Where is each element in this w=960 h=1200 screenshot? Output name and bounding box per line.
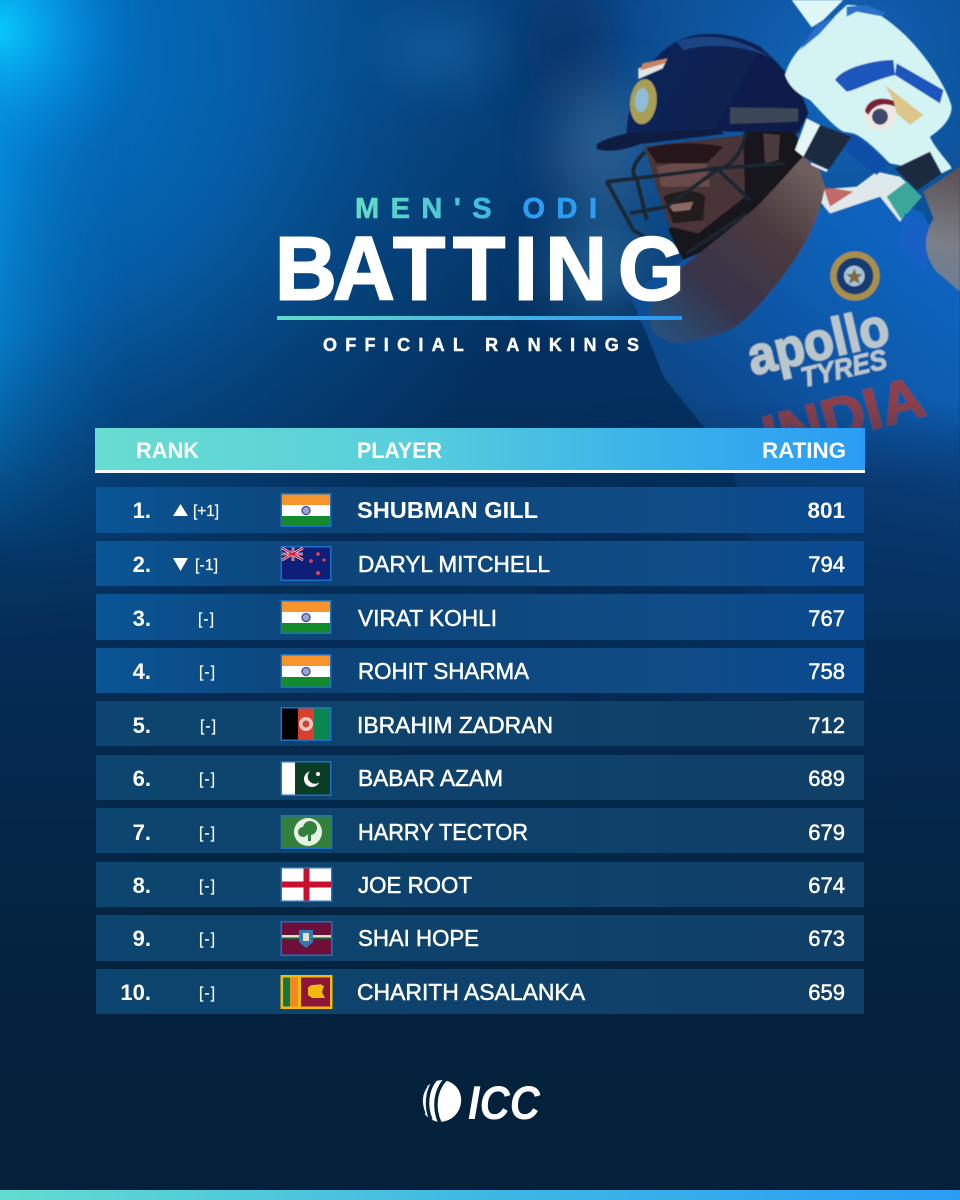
- row 5: Ibrahim Zadran: [96, 701, 864, 746]
- row 6: Babar Azam: BABAR AZAM: [358, 765, 503, 791]
- row 4: Rohit Sharma: 758: [808, 659, 845, 684]
- helmet shell: [627, 34, 808, 135]
- jersey sponsor logo: TYRES: [798, 343, 890, 393]
- rankings table: [95, 428, 865, 1014]
- flag: Sri Lanka: [280, 975, 332, 1009]
- row 8: Joe Root: 8.: [133, 873, 151, 898]
- photo fade: [600, 400, 960, 700]
- flag: Afghanistan: [280, 707, 332, 741]
- row 1: Shubman Gill: [+1]: [193, 503, 219, 520]
- jersey sponsor logo: apollo: [742, 297, 895, 387]
- row 8: Joe Root: 674: [808, 873, 845, 898]
- collar and shoulder trim: [814, 172, 922, 222]
- row 6: Babar Azam: 6.: [133, 766, 151, 791]
- flag: Pakistan: [280, 761, 332, 796]
- row 6: Babar Azam: [-]: [199, 771, 215, 788]
- body edge blend: [590, 450, 690, 670]
- face: [645, 135, 745, 233]
- eye shadow: [647, 143, 723, 163]
- glove: blue finger pads: [835, 60, 895, 92]
- glove: blue trim: [800, 5, 887, 50]
- far arm: [923, 167, 960, 292]
- flag: India: [280, 654, 332, 688]
- row 2: Daryl Mitchell: [-1]: [195, 557, 218, 574]
- row 2: Daryl Mitchell: [96, 541, 864, 586]
- row 2: Daryl Mitchell: DARYL MITCHELL: [358, 551, 550, 577]
- row 6: Babar Azam: 689: [808, 766, 845, 791]
- helmet grille: [607, 128, 785, 255]
- row 1: Shubman Gill: [96, 487, 864, 533]
- row 8: Joe Root: [-]: [199, 878, 215, 895]
- table header: [95, 428, 865, 473]
- row 4: Rohit Sharma: [96, 648, 864, 693]
- row 9: Shai Hope: 9.: [133, 926, 151, 951]
- row 4: Rohit Sharma: 4.: [133, 659, 151, 684]
- row 2: Daryl Mitchell: 2.: [133, 552, 151, 577]
- row 2: Daryl Mitchell: 794: [808, 552, 845, 577]
- row 3: Virat Kohli: [96, 594, 864, 640]
- row 3: Virat Kohli: 767: [808, 606, 845, 631]
- neck and lower head shadow: [668, 130, 807, 260]
- row 9: Shai Hope: [-]: [199, 931, 215, 948]
- row 1: Shubman Gill: 1.: [133, 498, 151, 523]
- mouth and beard: [663, 191, 705, 223]
- row 1: Shubman Gill: 801: [807, 498, 845, 523]
- row 8: Joe Root: JOE ROOT: [358, 872, 472, 898]
- title rule: [277, 316, 682, 320]
- row 10: Charith Asalanka: [-]: [199, 985, 215, 1002]
- row 5: Ibrahim Zadran: 712: [808, 713, 845, 738]
- flag: New Zealand: [280, 546, 332, 581]
- flag: India: [280, 600, 332, 634]
- eyebrow: MEN'S ODI: MEN'S ODI: [355, 193, 597, 225]
- row 9: Shai Hope: 673: [808, 926, 845, 951]
- wristband: far: [895, 152, 942, 191]
- row 1: Shubman Gill: SHUBMAN GILL: [357, 497, 538, 523]
- row 10: Charith Asalanka: [96, 969, 864, 1014]
- sleeve: [898, 213, 935, 270]
- flag: England: [280, 867, 332, 902]
- row 3: Virat Kohli: VIRAT KOHLI: [358, 605, 497, 631]
- row 10: Charith Asalanka: 10.: [120, 980, 151, 1005]
- subheading: OFFICIAL RANKINGS: OFFICIAL RANKINGS: [323, 335, 639, 355]
- row 9: Shai Hope: [96, 915, 864, 961]
- table header: RATING: [762, 438, 846, 463]
- row 7: Harry Tector: 7.: [133, 820, 151, 845]
- helmet BCCI crest: [628, 78, 659, 126]
- row 5: Ibrahim Zadran: [-]: [200, 718, 216, 735]
- title block: [275, 193, 684, 355]
- cheek highlight: [657, 157, 710, 187]
- row 10: Charith Asalanka: CHARITH ASALANKA: [357, 979, 586, 1005]
- jersey India lettering: INDIA: [755, 364, 932, 470]
- bat handle: [792, 0, 843, 27]
- background: [0, 0, 960, 918]
- row 4: Rohit Sharma: ROHIT SHARMA: [358, 658, 530, 684]
- ICC logo: [414, 1074, 541, 1129]
- icon: cricket ball with seams: [414, 1074, 468, 1128]
- lower body shadow right: [866, 640, 960, 730]
- row 9: Shai Hope: SHAI HOPE: [358, 925, 479, 951]
- near arm: [648, 157, 825, 343]
- jersey BCCI crest: [830, 251, 880, 301]
- helmet India flag sticker: [638, 58, 667, 79]
- ear: [763, 133, 780, 163]
- player photo: batter in India kit: [597, 0, 960, 700]
- row 3: Virat Kohli: [-]: [198, 611, 214, 628]
- row 7: Harry Tector: [96, 808, 864, 853]
- row 5: Ibrahim Zadran: IBRAHIM ZADRAN: [357, 712, 553, 738]
- bat handle badge: [864, 98, 896, 130]
- flag: India: [280, 493, 332, 527]
- glove: palm shade: [843, 133, 890, 175]
- row 5: Ibrahim Zadran: 5.: [133, 713, 151, 738]
- row 7: Harry Tector: HARRY TECTOR: [358, 819, 528, 845]
- heading: BATTING: BATTING: [275, 219, 684, 319]
- row 7: Harry Tector: 679: [808, 820, 845, 845]
- helmet top highlight: [677, 37, 772, 58]
- row 6: Babar Azam: [96, 755, 864, 800]
- table header: PLAYER: [357, 438, 442, 463]
- row 7: Harry Tector: [-]: [199, 825, 215, 842]
- ICC wordmark: ICC: [468, 1076, 541, 1129]
- bottom gradient bar: [0, 1190, 960, 1200]
- wristband: near: [803, 125, 852, 170]
- helmet brim: [597, 129, 723, 151]
- row 3: Virat Kohli: 3.: [133, 606, 151, 631]
- glove: main: [785, 5, 952, 173]
- row 8: Joe Root: [96, 862, 864, 907]
- table header: RANK: [136, 438, 199, 463]
- helmet side clip: [730, 107, 798, 124]
- row 10: Charith Asalanka: 659: [808, 980, 845, 1005]
- flag: Ireland cricket: [280, 815, 332, 849]
- flag: West Indies: [280, 921, 332, 956]
- row 4: Rohit Sharma: [-]: [199, 664, 215, 681]
- jersey torso: [628, 190, 960, 700]
